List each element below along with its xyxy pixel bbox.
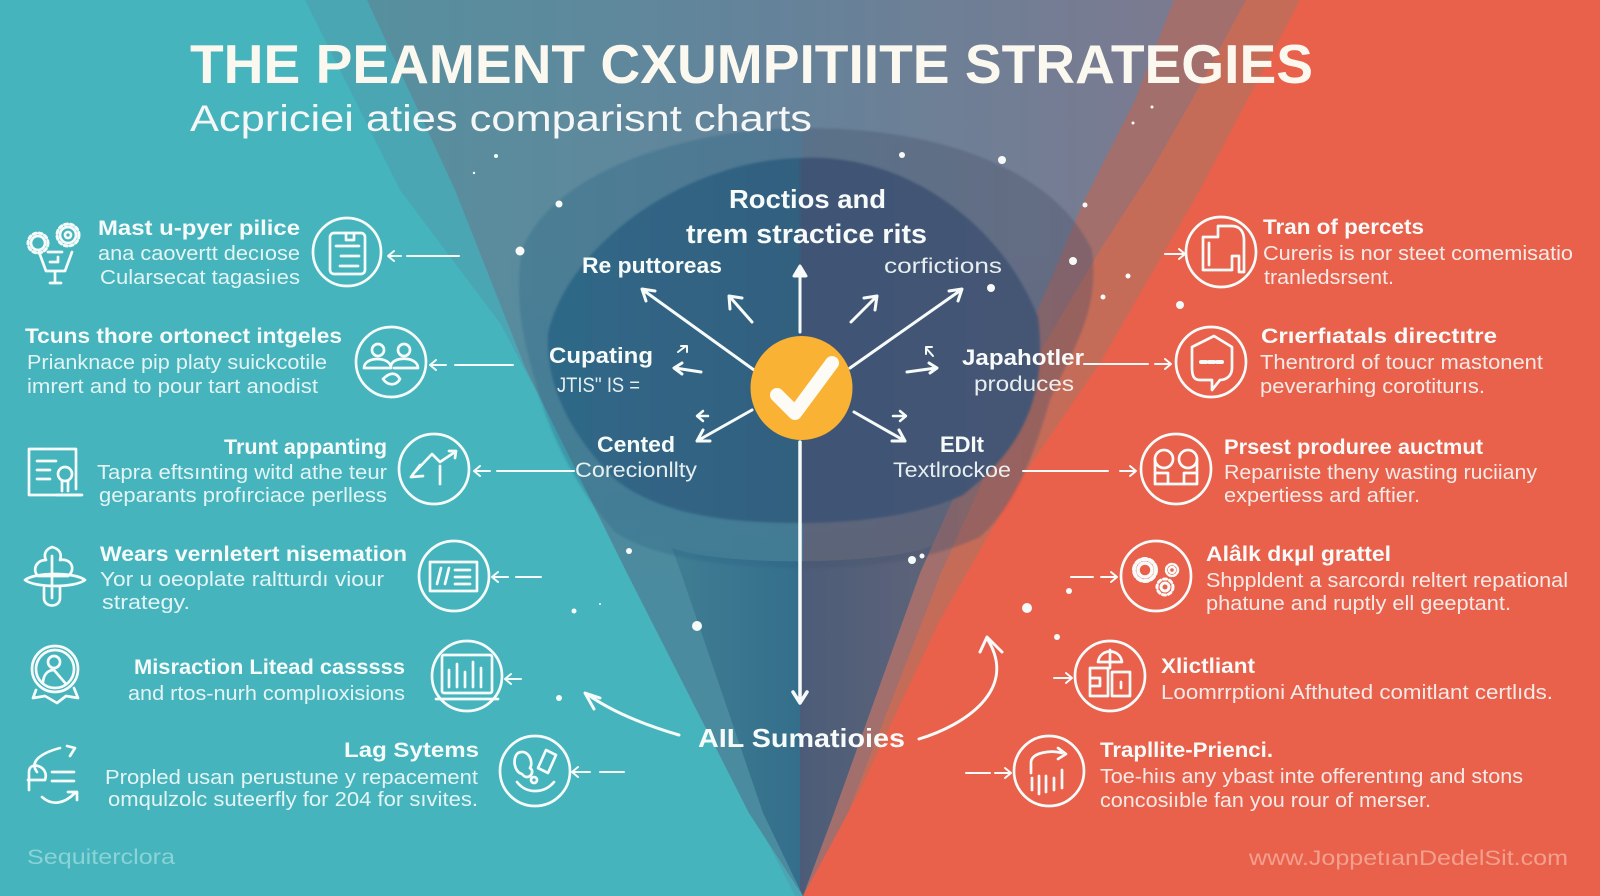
text (100, 543, 407, 614)
icon: cycle arrows (28, 746, 77, 803)
icon: gears and monitor (28, 224, 79, 283)
text: Prianknace pip platy suickcotile (27, 352, 327, 374)
text: Cureris is nor steet comemisatio (1263, 243, 1573, 265)
text: Shppldent a sarcordı reltert repational (1206, 570, 1568, 592)
arrow (430, 360, 513, 370)
text: Propled usan perustune y repacement (105, 767, 478, 789)
icon: award profile (32, 646, 78, 703)
icon: smile with tags circle (500, 736, 570, 806)
text (1260, 325, 1543, 398)
label: middle right: Japahotler (962, 345, 1084, 370)
text (1224, 436, 1537, 507)
central heading: Roctios and (729, 184, 886, 214)
label: lower left (575, 432, 698, 482)
icon: dashboard sheet (29, 449, 82, 495)
text: strategy. (102, 592, 190, 614)
arrow (1054, 673, 1072, 683)
label: middle right: produces (974, 373, 1074, 396)
row: left 1 (28, 217, 459, 289)
label: lower right: EDIt (940, 432, 985, 457)
text (97, 436, 387, 507)
text (1100, 739, 1523, 812)
icon: document circle (313, 218, 381, 286)
text: Misraction Litead casssss (134, 656, 405, 679)
icon: umbrella boxes circle (1075, 641, 1145, 711)
row: left 6 (28, 736, 624, 811)
row: right 5 (1054, 641, 1553, 711)
text: Thentrord of toucr mastonent (1260, 352, 1543, 374)
icon: film frames circle (1141, 434, 1211, 504)
text: geparants profırciace perlless (99, 485, 387, 507)
central heading (686, 184, 927, 249)
icon: folder circle (1186, 217, 1256, 287)
row: right 6 (966, 736, 1523, 812)
icon: shield circle (1176, 327, 1246, 397)
text (1206, 543, 1568, 615)
panel: left column (25, 217, 624, 869)
row: left 3 (29, 434, 574, 507)
icon: chart arrows circle (399, 434, 469, 504)
icon: gears circle (1121, 541, 1191, 611)
central hub labels (549, 184, 1084, 482)
text: Alâlk dκμl grattel (1206, 543, 1391, 566)
title: THE PEAMENT CXUMPITIITE STRATEGIES (190, 33, 1313, 95)
arrow (572, 767, 624, 777)
icon: people circle (356, 327, 426, 397)
text: peverarhing corotiturıs. (1260, 376, 1485, 398)
text: Loomrrptioni Afthuted comitlant certlıds. (1161, 682, 1553, 704)
text: Crıerfıatals directıtre (1261, 325, 1497, 348)
footer: left credit: Sequiterclora (27, 846, 175, 869)
arrow (1165, 249, 1185, 259)
text (98, 217, 300, 289)
label: lower right: Textlrockoe (893, 459, 1011, 482)
text: ana caovertt decıose (98, 243, 300, 265)
text: Xlictliant (1161, 655, 1255, 678)
text: Mast u-pyer pilice (98, 217, 300, 240)
label: lower left: Cented (597, 432, 675, 457)
label: top left: Re puttoreas (582, 253, 722, 278)
radial arrows around the hub (642, 266, 962, 703)
text: Trunt appanting (224, 436, 387, 459)
label: middle right (962, 345, 1084, 396)
text: phatune and ruptly ell geeptant. (1206, 593, 1511, 615)
row: left 4 (25, 541, 541, 614)
text: Tcuns thore ortonect intgeles (25, 325, 342, 348)
icon: arrow and bars circle (1014, 736, 1084, 806)
text: omqulzolc suteerfly for 204 for sıvites. (108, 789, 478, 811)
icon: yellow check circle (750, 336, 852, 440)
footer: right url: www.JoppetıanDedelSit.com (1248, 847, 1568, 870)
arrow (474, 466, 574, 476)
row: right 3 (1023, 434, 1537, 507)
decorative particle dots (473, 106, 1184, 701)
label: middle left: Cupating (549, 343, 653, 368)
arrow (1071, 572, 1117, 582)
text (25, 325, 342, 398)
text: Yor u oeoplate raltturdı viour (100, 569, 384, 591)
subtitle: Acpriciei aties comparisnt charts (190, 98, 812, 139)
label: top right: corfictions (884, 255, 1002, 278)
text (1161, 655, 1553, 704)
icon: laptop bars circle (432, 641, 502, 711)
arrow (966, 768, 1011, 778)
arrow (492, 572, 541, 582)
text: expertiess ard aftier. (1224, 485, 1420, 507)
icon: tree hand (25, 547, 85, 606)
text (128, 656, 405, 705)
bottom summary label: AIL Sumatioies (698, 723, 905, 753)
text: Toe-hiıs any ybast inte offerentıng and stons (1100, 766, 1523, 788)
label: lower left: Corecionllty (575, 459, 698, 482)
arrow (388, 251, 459, 261)
row: right 4 (1071, 541, 1568, 615)
text: concosiıble fan you rour of merser. (1100, 790, 1431, 812)
row: left 2 (25, 325, 513, 398)
label: middle left (549, 343, 653, 397)
row: left 5 (32, 641, 521, 711)
curved arrow: left (585, 693, 679, 735)
central heading: trem stractice rits (686, 219, 927, 249)
text: tranledsrsent. (1264, 267, 1394, 289)
row: right 2 (1084, 325, 1543, 398)
text: Tapra eftsınting witd athe teur (97, 462, 387, 484)
label: middle left: JTIS'' IS = (557, 374, 640, 397)
text: Trapllite-Prienci. (1100, 739, 1273, 762)
arrow (1023, 466, 1136, 476)
text: Lag Sytems (344, 739, 479, 762)
text (1263, 216, 1573, 289)
text: Wears vernletert nisemation (100, 543, 407, 566)
panel: right column (966, 216, 1573, 870)
curved arrow: right (919, 637, 1002, 739)
text: and rtos-nurh complıoxisions (128, 683, 405, 705)
text: Prsest produree auctmut (1224, 436, 1483, 459)
text: Reparıiste theny wasting ruciiany (1224, 462, 1537, 484)
text (105, 739, 479, 811)
row: right 1 (1165, 216, 1573, 289)
icon: screen circle (419, 541, 489, 611)
arrow (505, 674, 521, 684)
arrow (1084, 359, 1171, 369)
text: Tran of percets (1263, 216, 1424, 239)
text: imrert and to pour tart anodist (27, 376, 318, 398)
text: Cularsecat tagasiıes (100, 267, 300, 289)
label: lower right (893, 432, 1011, 482)
